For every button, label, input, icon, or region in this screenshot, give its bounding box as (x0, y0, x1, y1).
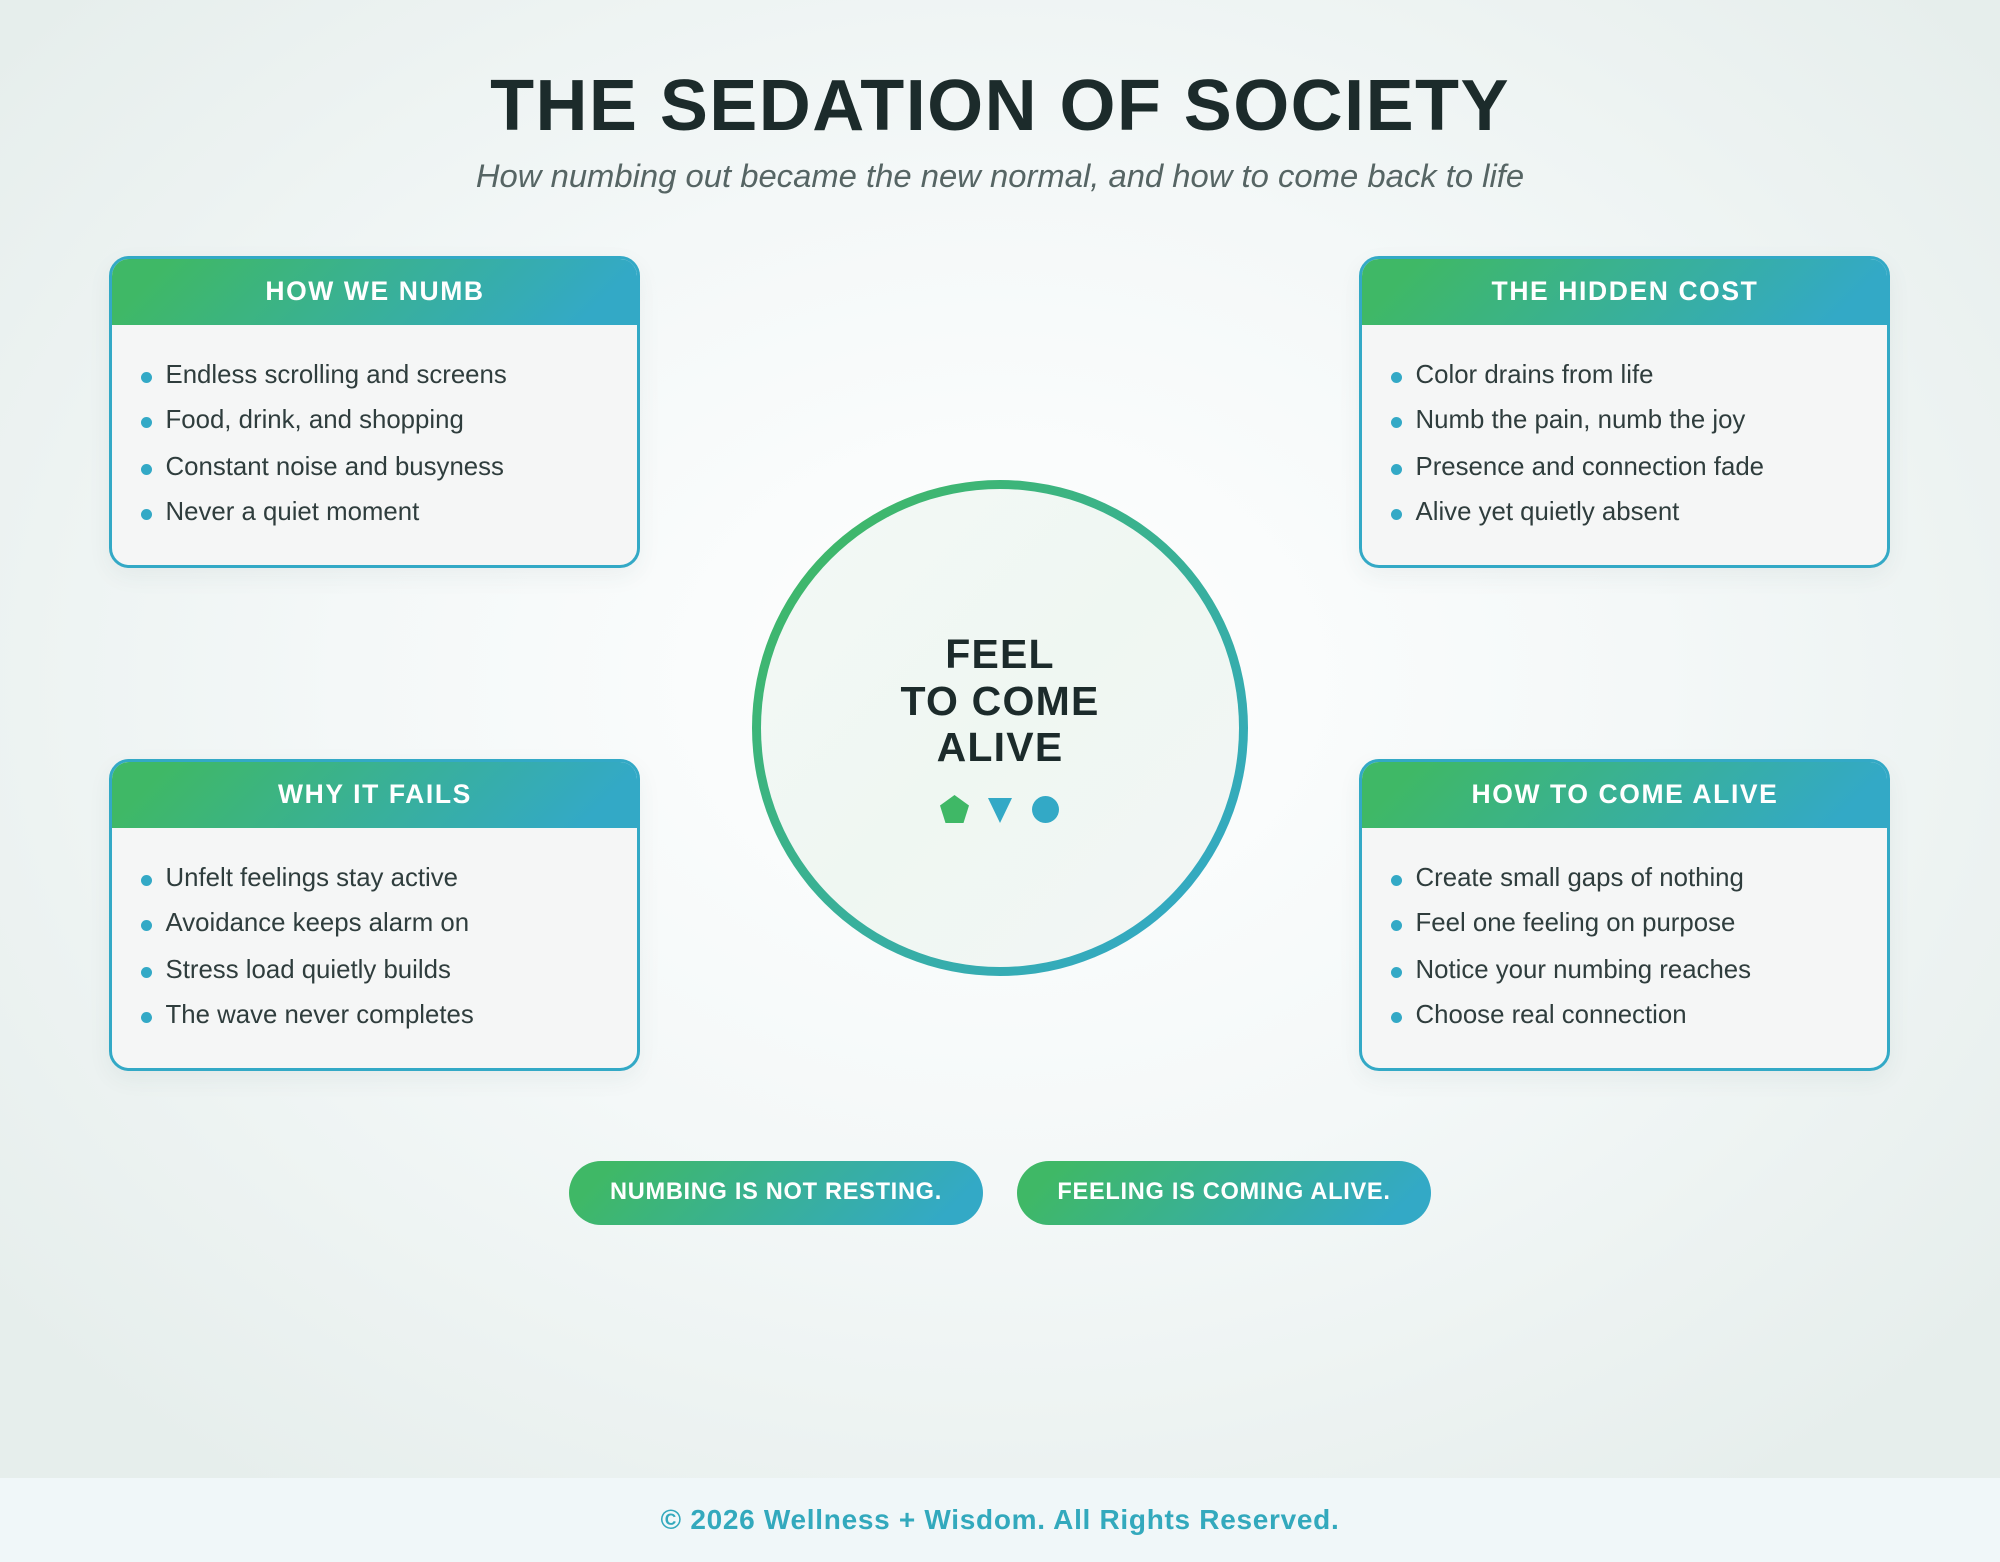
title: THE SEDATION OF SOCIETY (490, 66, 1510, 146)
icon: blue triangle (988, 798, 1012, 823)
list item: Color drains from life (1416, 361, 1653, 389)
list item: Constant noise and busyness (166, 453, 504, 481)
callout: feeling is coming alive (1017, 1161, 1431, 1225)
list item: Numb the pain, numb the joy (1416, 406, 1745, 434)
panel: how we numb (109, 256, 640, 568)
panel heading: how we numb: HOW WE NUMB (265, 276, 485, 306)
list item: Unfelt feelings stay active (166, 864, 458, 892)
callout: numbing is not resting (569, 1161, 983, 1225)
panel heading: how to come alive: HOW TO COME ALIVE (1472, 779, 1778, 809)
list item: Stress load quietly builds (166, 956, 451, 984)
list item: Presence and connection fade (1416, 453, 1764, 481)
panel heading: how we numb (112, 259, 637, 325)
panel: how to come alive (1359, 759, 1890, 1071)
icon: blue circle (1032, 796, 1059, 823)
list item: Food, drink, and shopping (166, 406, 464, 434)
central message: FEEL (945, 631, 1055, 677)
central message: ALIVE (937, 724, 1063, 770)
central circle (752, 480, 1248, 976)
panel heading: why it fails: WHY IT FAILS (278, 779, 472, 809)
list item: Notice your numbing reaches (1416, 956, 1751, 984)
callout: feeling is coming alive: FEELING IS COMING ALIVE. (1057, 1179, 1391, 1205)
panel: why it fails (109, 759, 640, 1071)
list item: Alive yet quietly absent (1416, 498, 1679, 526)
list item: Never a quiet moment (166, 498, 419, 526)
list item: Endless scrolling and screens (166, 361, 507, 389)
list item: The wave never completes (166, 1001, 474, 1029)
panel heading: the hidden cost (1362, 259, 1887, 325)
panel: the hidden cost (1359, 256, 1890, 568)
central message (900, 631, 1100, 770)
list item: Feel one feeling on purpose (1416, 909, 1735, 937)
callout: numbing is not resting: NUMBING IS NOT RESTING. (610, 1179, 942, 1205)
list item: Create small gaps of nothing (1416, 864, 1744, 892)
footer text: © 2026 Wellness + Wisdom. All Rights Reserved. (661, 1504, 1339, 1535)
list item: Choose real connection (1416, 1001, 1687, 1029)
icon: green pentagon (940, 795, 969, 823)
list item: Avoidance keeps alarm on (166, 909, 469, 937)
circle inner fill (761, 489, 1239, 967)
panel heading: how to come alive (1362, 762, 1887, 828)
subtitle: How numbing out became the new normal, and how to come back to life (476, 157, 1524, 194)
panel heading: why it fails (112, 762, 637, 828)
footer band (0, 1478, 2000, 1562)
panel heading: the hidden cost: THE HIDDEN COST (1492, 276, 1758, 306)
central message: TO COME (900, 678, 1100, 724)
